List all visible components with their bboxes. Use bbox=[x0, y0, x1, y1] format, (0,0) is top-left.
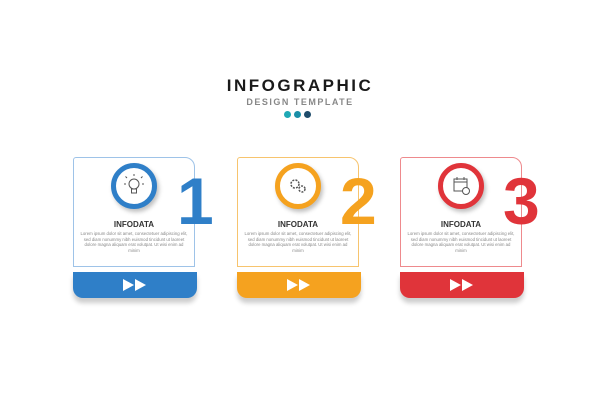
heading: INFODATA bbox=[114, 220, 154, 229]
card outline 1 bbox=[73, 157, 195, 267]
heading: INFODATA bbox=[441, 220, 481, 229]
panel: step 3 bbox=[398, 157, 540, 305]
panel: step 1 bbox=[71, 157, 214, 305]
icon: calendar bbox=[438, 163, 484, 209]
title: INFOGRAPHIC bbox=[227, 76, 373, 95]
icon: bulb bbox=[111, 163, 157, 209]
subtitle: DESIGN TEMPLATE bbox=[246, 97, 354, 107]
bar 1 bbox=[73, 272, 197, 298]
heading: INFODATA bbox=[278, 220, 318, 229]
panel: step 2 bbox=[235, 157, 377, 305]
card outline 2 bbox=[237, 157, 359, 267]
number 1: 1 bbox=[177, 164, 214, 238]
dots bbox=[284, 111, 311, 118]
bar 2 bbox=[237, 272, 361, 298]
text: Lorem ipsum dolor sit amet, consectetuer adipiscing elit, sed diam nonummy nibh euismod tincidunt ut laoreet dolore magna aliquam erat volutpat. Ut wisi enim ad minim bbox=[408, 231, 514, 252]
number 2: 2 bbox=[340, 164, 377, 238]
icon: gears bbox=[275, 163, 321, 209]
bar 3 bbox=[400, 272, 524, 298]
number 3: 3 bbox=[503, 164, 540, 238]
text: Lorem ipsum dolor sit amet, consectetuer adipiscing elit, sed diam nonummy nibh euismod tincidunt ut laoreet dolore magna aliquam erat volutpat. Ut wisi enim ad minim bbox=[244, 231, 352, 252]
text: Lorem ipsum dolor sit amet, consectetuer adipiscing elit, sed diam nonummy nibh euismod tincidunt ut laoreet dolore magna aliquam erat volutpat. Ut wisi enim ad minim bbox=[80, 231, 188, 252]
card outline 3 bbox=[400, 157, 522, 267]
